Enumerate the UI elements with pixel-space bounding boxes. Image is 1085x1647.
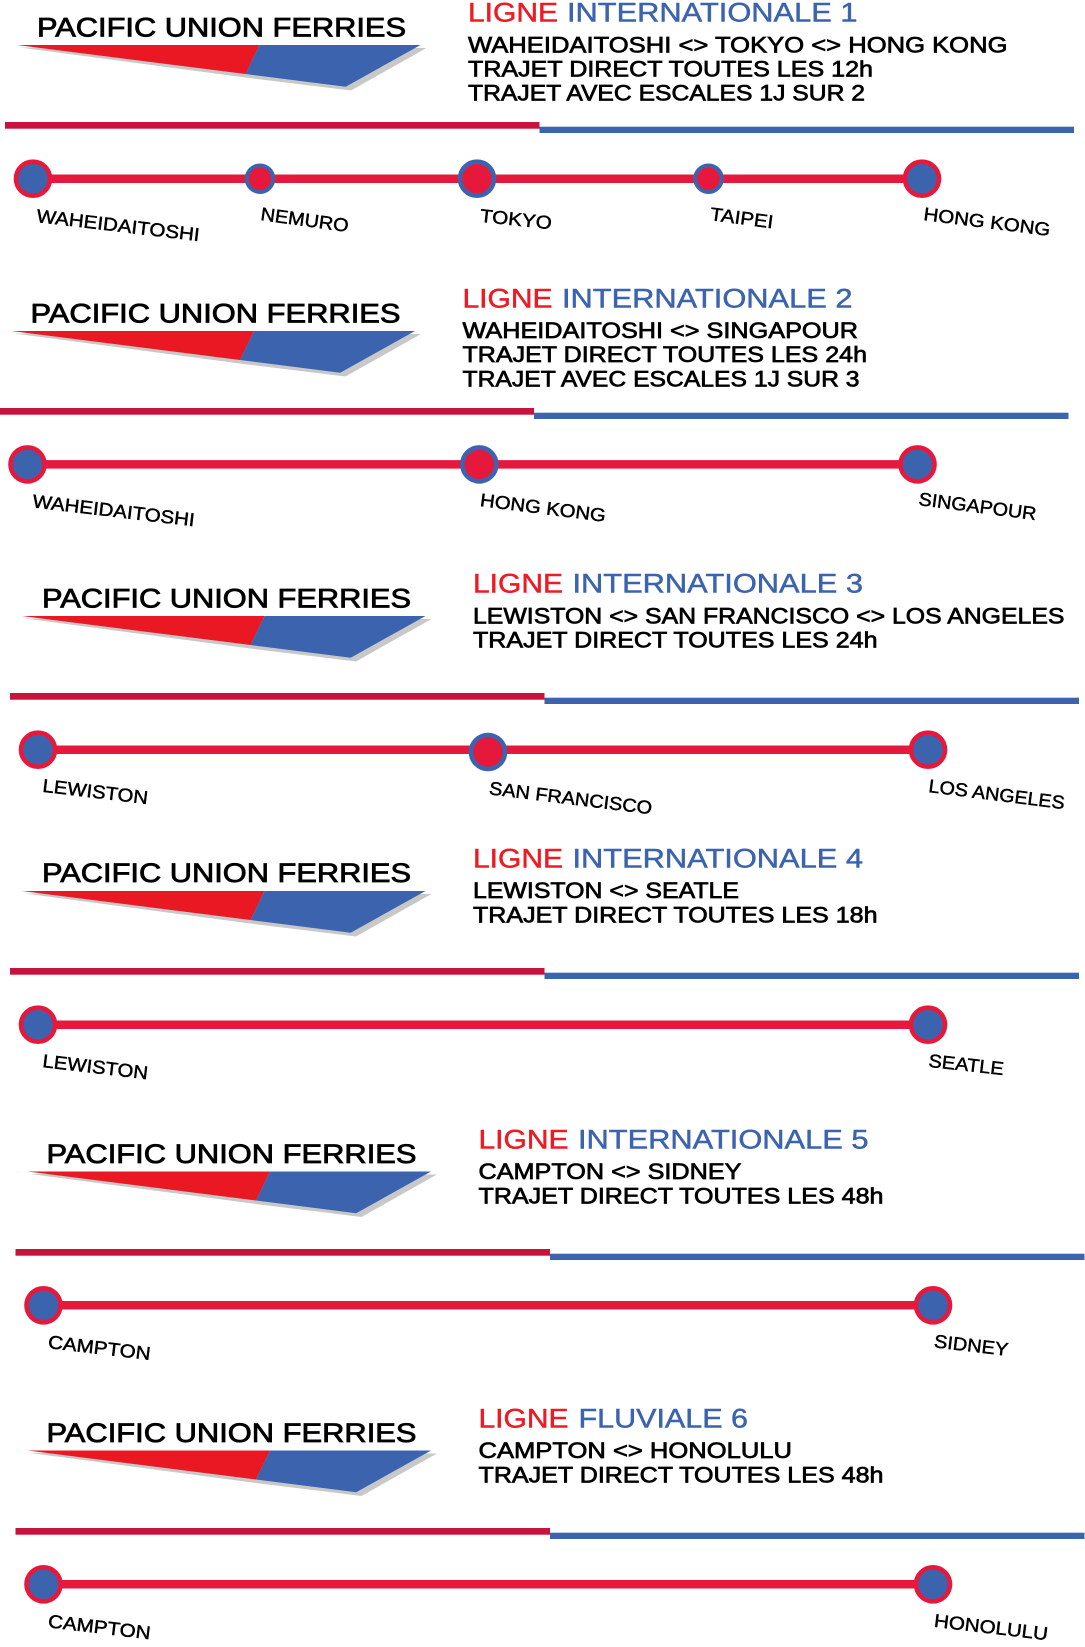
heading: ligne internationale 3: LIGNE <box>473 568 563 598</box>
text block: route details: WAHEIDAITOSHI <> SINGAPOUR <box>462 318 858 343</box>
station labels: NEMURO <box>259 203 350 236</box>
logo: pacific union ferries: PACIFIC UNION FERRIES <box>46 1418 416 1448</box>
heading: ligne internationale 2: LIGNE <box>462 284 552 314</box>
heading: ligne internationale 3 <box>473 568 863 598</box>
station labels: HONG KONG <box>479 489 607 526</box>
heading: ligne fluviale 6 <box>478 1404 748 1434</box>
station labels <box>32 488 1038 530</box>
logo: pacific union ferries <box>22 858 432 936</box>
text block: route details: LEWISTON <> SAN FRANCISCO <> LOS ANGELES <box>473 604 1064 628</box>
text block: route details <box>478 1438 884 1488</box>
logo: pacific union ferries <box>22 584 432 662</box>
text block: route details: TRAJET DIRECT TOUTES LES 18h <box>473 902 878 928</box>
text block: route details: TRAJET DIRECT TOUTES LES 24h <box>462 342 867 367</box>
divider bar: red and blue <box>10 693 1079 704</box>
route line with stations <box>26 1567 950 1601</box>
divider bar: red and blue <box>5 122 1074 133</box>
station labels: SINGAPOUR <box>917 488 1038 524</box>
station labels: LEWISTON <box>42 775 149 808</box>
heading: ligne internationale 5: INTERNATIONALE 5 <box>578 1124 868 1154</box>
text block: route details: CAMPTON <> SIDNEY <box>478 1159 742 1184</box>
panel: ligne fluviale 6 <box>16 1404 1084 1644</box>
text block: route details: TRAJET AVEC ESCALES 1J SUR 3 <box>462 366 860 392</box>
logo: pacific union ferries: PACIFIC UNION FERRIES <box>30 299 400 329</box>
logo: pacific union ferries <box>17 13 426 91</box>
text block: route details <box>473 604 1064 652</box>
logo: pacific union ferries: PACIFIC UNION FERRIES <box>42 584 411 614</box>
heading: ligne internationale 1 <box>468 0 858 28</box>
panel: ligne internationale 5 <box>16 1124 1084 1364</box>
route line with stations <box>26 1288 950 1322</box>
panel: ligne internationale 4 <box>10 844 1079 1083</box>
text block: route details: TRAJET DIRECT TOUTES LES 24h <box>473 628 878 652</box>
text block: route details: TRAJET DIRECT TOUTES LES 48h <box>478 1184 884 1208</box>
panel: ligne internationale 1 <box>5 0 1074 245</box>
station labels: WAHEIDAITOSHI <box>36 205 201 245</box>
heading: ligne internationale 5 <box>478 1124 868 1154</box>
text block: route details: TRAJET DIRECT TOUTES LES 12h <box>468 56 873 82</box>
station labels: LOS ANGELES <box>927 775 1066 813</box>
divider bar: red and blue <box>16 1249 1084 1260</box>
heading: ligne fluviale 6: LIGNE <box>478 1404 568 1434</box>
route line with stations <box>10 447 934 481</box>
text block: route details <box>468 32 1008 106</box>
logo: pacific union ferries <box>28 1418 437 1496</box>
station labels: WAHEIDAITOSHI <box>32 490 196 530</box>
logo: pacific union ferries: PACIFIC UNION FERRIES <box>37 13 406 43</box>
panel: ligne internationale 3 <box>10 568 1079 818</box>
station labels: TOKYO <box>479 205 553 233</box>
text block: route details: TRAJET DIRECT TOUTES LES 48h <box>478 1462 884 1488</box>
station labels: CAMPTON <box>47 1331 152 1364</box>
text block: route details: CAMPTON <> HONOLULU <box>478 1438 792 1463</box>
route line with stations <box>21 733 945 769</box>
heading: ligne fluviale 6: FLUVIALE 6 <box>578 1404 748 1434</box>
panel: ligne internationale 2 <box>0 284 1068 530</box>
text block: route details: WAHEIDAITOSHI <> TOKYO <> HONG KONG <box>468 32 1008 58</box>
station labels: CAMPTON <box>47 1610 152 1643</box>
text block: route details <box>462 318 867 392</box>
heading: ligne internationale 2: INTERNATIONALE 2 <box>562 284 852 314</box>
station labels: TAIPEI <box>709 203 775 232</box>
heading: ligne internationale 3: INTERNATIONALE 3 <box>572 568 863 598</box>
divider bar: red and blue <box>16 1528 1084 1539</box>
heading: ligne internationale 4: LIGNE <box>473 844 563 874</box>
heading: ligne internationale 4: INTERNATIONALE 4 <box>572 844 863 874</box>
station labels: LEWISTON <box>42 1050 149 1083</box>
route line with stations <box>16 162 939 196</box>
station labels <box>36 203 1052 245</box>
text block: route details: LEWISTON <> SEATLE <box>473 878 739 903</box>
logo: pacific union ferries: PACIFIC UNION FERRIES <box>46 1139 416 1169</box>
station labels <box>42 775 1066 818</box>
route line with stations <box>21 1008 945 1042</box>
station labels <box>47 1330 1009 1364</box>
station labels: SIDNEY <box>933 1330 1009 1360</box>
heading: ligne internationale 4 <box>473 844 863 874</box>
heading: ligne internationale 5: LIGNE <box>478 1124 568 1154</box>
station labels: HONG KONG <box>922 203 1052 240</box>
text block: route details: TRAJET AVEC ESCALES 1J SUR 2 <box>468 80 865 106</box>
station labels: HONOLULU <box>933 1610 1049 1644</box>
station labels <box>47 1610 1049 1644</box>
text block: route details <box>473 878 878 928</box>
divider bar: red and blue <box>10 968 1079 979</box>
text block: route details <box>478 1159 884 1208</box>
station labels <box>42 1050 1005 1083</box>
divider bar: red and blue <box>0 408 1068 419</box>
station labels: SAN FRANCISCO <box>488 777 653 818</box>
logo: pacific union ferries <box>12 299 421 376</box>
logo: pacific union ferries: PACIFIC UNION FERRIES <box>42 858 411 888</box>
heading: ligne internationale 2 <box>462 284 852 314</box>
logo: pacific union ferries <box>28 1139 437 1217</box>
station labels: SEATLE <box>928 1050 1005 1079</box>
